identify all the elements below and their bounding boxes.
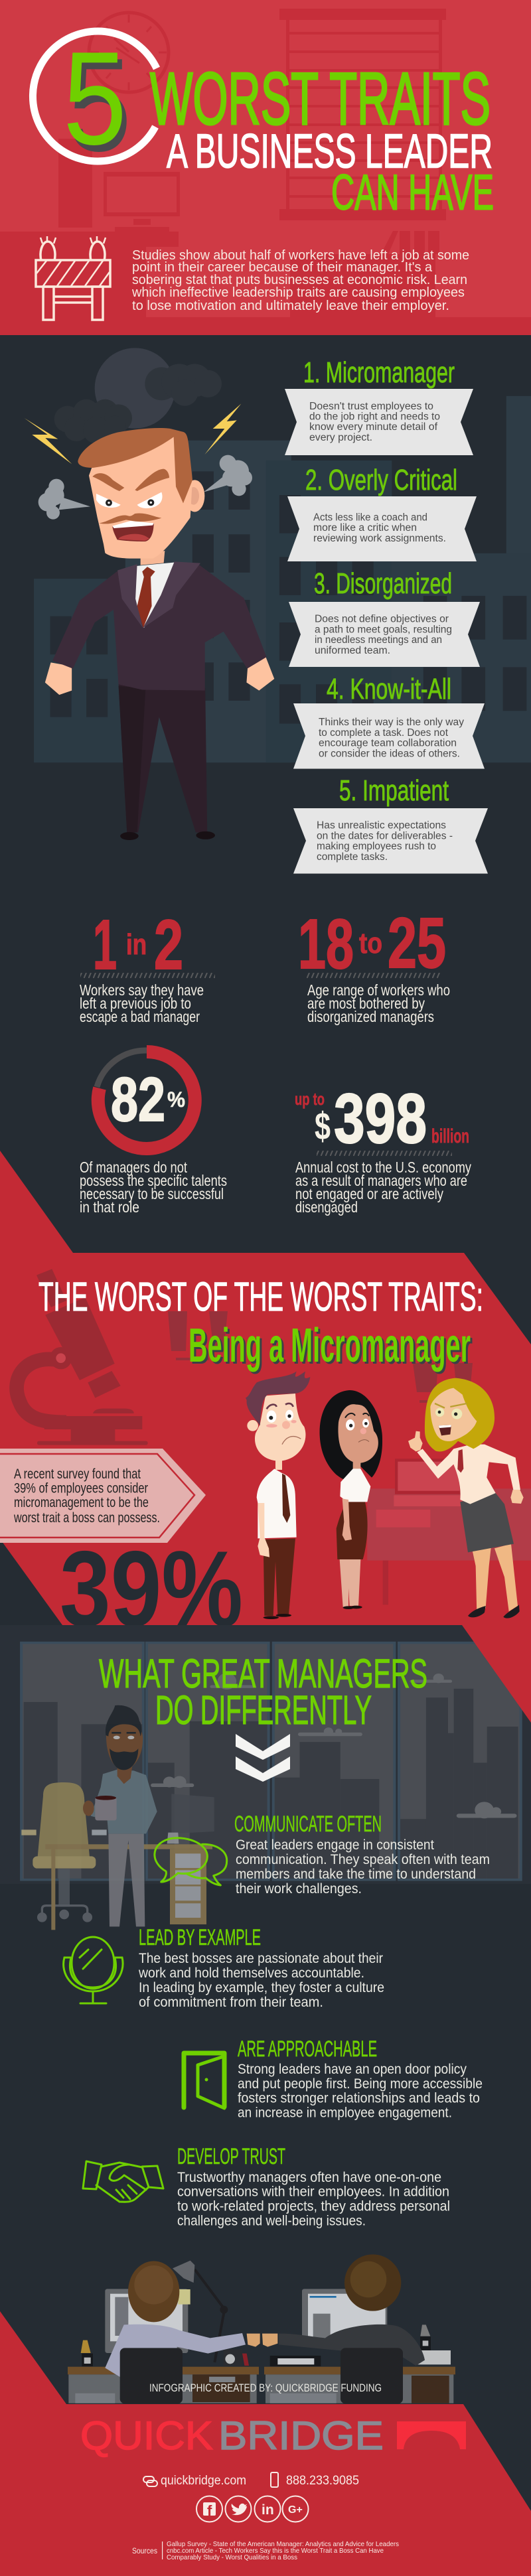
desk [45, 1833, 212, 1930]
boss fists [45, 662, 72, 695]
stat text: disengaged [295, 1198, 358, 1216]
illustration: two colleagues fist bump [68, 2254, 455, 2403]
callout: survey [0, 1449, 206, 1543]
trait 1 heading: 1. Micromanager [303, 356, 455, 389]
illustration: angry boss head [25, 348, 252, 565]
trait 5 ribbon [293, 808, 488, 873]
trait 5 text: Has unrealistic expectations [317, 820, 446, 831]
stat text [80, 1159, 227, 1216]
stat number: 2 [154, 906, 183, 984]
trait 3 text: Does not define objectives or [315, 613, 449, 625]
stat text: Of managers do not [80, 1159, 187, 1176]
desk right [264, 2367, 455, 2403]
sad woman [320, 1390, 382, 1609]
trait 5 text: making employees rush to [317, 841, 436, 852]
trait 3 text: uniformed team. [315, 645, 390, 656]
stat: 82% [80, 1050, 227, 1216]
trait 3 heading: 3. Disorganized [314, 567, 452, 600]
stat number: 18 [298, 905, 354, 983]
stat text: Age range of workers who [307, 981, 450, 999]
background desk and monitor [367, 1459, 531, 1605]
callout text: micromanagement to be the [14, 1495, 149, 1510]
panel: footer [0, 2311, 531, 2576]
contact row: quickbridge.com [161, 2474, 246, 2488]
trait 3 [289, 567, 480, 667]
background microscope [17, 1269, 148, 1445]
neck [141, 551, 165, 565]
stat text: necessary to be successful [80, 1185, 224, 1202]
icon: linkedin: in [262, 2502, 274, 2518]
sources: Gallup Survey - State of the American Manager: Analytics and Advice for Leaders [167, 2540, 399, 2548]
big 39 percent: 39% [60, 1529, 243, 1649]
item heading: ARE APPROACHABLE [238, 2037, 377, 2062]
trait 1 ribbon [285, 389, 473, 455]
background beakers [168, 1311, 473, 1403]
icon: twitter [232, 2504, 247, 2515]
ear [185, 480, 204, 512]
item text: challenges and well-being issues. [177, 2214, 366, 2228]
intro text: to lose motivation and ultimately leave their employer. [132, 299, 449, 313]
mustache [99, 514, 161, 524]
stat number: $ [315, 1105, 331, 1148]
desk items [81, 2325, 451, 2366]
stat number: up to [295, 1089, 325, 1109]
intro text: sobering stat that puts businesses at economic risk. Learn [132, 273, 467, 287]
icon: facebook [203, 2502, 216, 2519]
intro text: which ineffective leadership traits are causing employees [131, 285, 465, 300]
percentage value: % [167, 1088, 185, 1111]
panel: worst trait red background shape [0, 1151, 531, 1723]
item text: Trustworthy managers often have one-on-one [177, 2170, 441, 2185]
trait 1 text: do the job right and needs to [309, 411, 440, 422]
sticky note [178, 2289, 190, 2305]
illustration: coworkers [246, 1372, 524, 1619]
trait 1 text: know every minute detail of [309, 421, 438, 433]
trait 2 text: more like a critic when [313, 522, 417, 534]
sad man [246, 1372, 310, 1619]
trait 2 text [313, 512, 446, 544]
item heading: COMMUNICATE OFTEN [234, 1812, 382, 1837]
intro text: point in their career because of their manager. It's a [132, 260, 433, 275]
face [89, 437, 192, 559]
sources: cnbc.com Article - Tech Workers Say this is the Worst Trait a Boss Can Have [167, 2547, 384, 2555]
stat text: in that role [80, 1198, 139, 1216]
trait 3 text [315, 613, 452, 656]
trait 5 heading: 5. Impatient [339, 774, 449, 807]
stat number [298, 902, 446, 983]
lightning bolts [25, 403, 241, 464]
trait 3 text: a path to meet goals, resulting [315, 624, 452, 636]
stat number: billion [431, 1125, 469, 1147]
background office illustration [0, 9, 531, 335]
stat number: 398 [334, 1080, 427, 1158]
icon: facebook: f [207, 2502, 212, 2519]
background clock [89, 13, 169, 92]
social icons [196, 2496, 308, 2522]
stat text: possess the specific talents [80, 1172, 227, 1189]
callout text [13, 1467, 160, 1526]
item: lead by example [64, 1925, 384, 2010]
icon: road barrier [36, 236, 110, 320]
item text: members and take the time to understand [236, 1867, 476, 1882]
angry woman [408, 1378, 524, 1618]
icon: open door [184, 2053, 224, 2108]
trait 2 text: Acts less like a coach and [313, 512, 427, 523]
item text [238, 2062, 483, 2121]
trait 4 heading: 4. Know-it-All [327, 673, 451, 705]
right monitor [302, 2289, 387, 2338]
illustration: angry boss body [45, 561, 274, 840]
trait 4 [293, 673, 485, 768]
intro text: Studies show about half of workers have left a job at some [132, 248, 469, 263]
eyebrows [92, 469, 169, 491]
item text: The best bosses are passionate about their [139, 1951, 383, 1966]
what great managers heading: DO DIFFERENTLY [155, 1687, 372, 1733]
callout text: A recent survey found that [14, 1467, 141, 1482]
trait 4 text: to complete a task. Does not [319, 727, 449, 739]
trait 2 ribbon [287, 496, 477, 561]
panel: traits background buildings [34, 396, 531, 762]
trait 3 ribbon [289, 602, 480, 667]
sources: Sources [132, 2546, 157, 2555]
item text [177, 2170, 450, 2228]
trait 1 text: Doesn't trust employees to [309, 401, 433, 412]
logo [80, 2413, 466, 2458]
illustration: manager in office [21, 1705, 214, 1930]
donut chart [97, 1050, 195, 1149]
trait 5 text [317, 820, 453, 863]
stat text: Annual cost to the U.S. economy [295, 1159, 471, 1176]
item heading: DEVELOP TRUST [177, 2144, 285, 2169]
intro text [131, 248, 469, 313]
steam clouds [38, 455, 252, 520]
trait 1 [285, 356, 473, 455]
trait 4 text: encourage team collaboration [319, 738, 457, 749]
item text: and put people first. Being more accessible [238, 2076, 483, 2092]
item heading: LEAD BY EXAMPLE [139, 1925, 261, 1950]
stat number: 1 [93, 906, 117, 984]
icon: speech bubbles [155, 1838, 227, 1885]
stat: $398 billion [295, 1080, 471, 1216]
stat number: 25 [388, 902, 446, 983]
stat text: are most bothered by [307, 995, 425, 1012]
item text: Great leaders engage in consistent [236, 1837, 434, 1853]
stat number [93, 906, 183, 984]
stat text [80, 981, 204, 1025]
trait 1 text [309, 401, 440, 443]
item text: their work challenges. [236, 1881, 362, 1896]
manager [83, 1705, 157, 1926]
credit line: INFOGRAPHIC CREATED BY: QUICKBRIDGE FUNDING [149, 2382, 382, 2394]
icon: double chevron [236, 1734, 290, 1782]
icon: link [143, 2476, 157, 2486]
icon: handshake [83, 2161, 163, 2202]
monitor [171, 1794, 214, 1833]
left person [105, 2261, 260, 2403]
stat text [295, 1159, 471, 1216]
callout text: 39% of employees consider [14, 1481, 148, 1496]
trait 3 text: in needless meetings and an [315, 634, 442, 646]
percentage value: 82 [111, 1064, 165, 1134]
sources [132, 2540, 399, 2561]
right person [262, 2254, 425, 2403]
item text: conversations with their employees. In addition [177, 2184, 449, 2199]
desk lamp [173, 2261, 228, 2362]
eyes [96, 492, 162, 508]
stat text: disorganized managers [307, 1008, 434, 1025]
item text: Strong leaders have an open door policy [238, 2062, 467, 2077]
item text [236, 1837, 490, 1896]
stat: 1 in 2 [80, 906, 215, 1025]
callout text: worst trait a boss can possess. [13, 1510, 160, 1526]
item text: work and hold themselves accountable. [138, 1966, 364, 1981]
item text: an increase in employee engagement. [238, 2105, 452, 2121]
what great managers heading [99, 1651, 427, 1733]
trait 2 text: reviewing work assignments. [313, 533, 446, 544]
trait 5 [293, 774, 488, 873]
icon: google plus: G+ [288, 2504, 303, 2516]
stat number [295, 1080, 469, 1158]
boss jacket [52, 565, 267, 691]
title ring around the 5 [33, 31, 157, 161]
item: communicate often [155, 1812, 490, 1896]
panel: managers background office [0, 1625, 531, 1924]
item: develop trust [83, 2144, 450, 2228]
left monitor [105, 2289, 188, 2353]
item text: of commitment from their team. [139, 1995, 323, 2010]
dark moon and clouds [54, 348, 222, 443]
office chair [21, 1782, 107, 1922]
trait 4 text [319, 717, 464, 759]
stat: 18 to 25 [298, 902, 450, 1025]
trait 4 ribbon [293, 703, 485, 768]
trait 2 heading: 2. Overly Critical [305, 464, 457, 496]
stat text: as a result of managers who are [295, 1172, 467, 1189]
stat number: to [359, 927, 382, 960]
item text: fosters stronger relationships and leads to [238, 2090, 480, 2106]
item text: communication. They speak often with team [236, 1852, 490, 1867]
trait 5 text: complete tasks. [317, 851, 388, 863]
panel: worst trait background [17, 1269, 531, 1605]
trait 4 text: or consider the ideas of others. [319, 749, 460, 759]
trait 1 text: every project. [309, 432, 372, 443]
title number 5: 5 [63, 25, 127, 173]
trait 5 text: on the dates for deliverables - [317, 831, 453, 841]
item text [138, 1951, 384, 2010]
panel: header [0, 0, 531, 335]
stat text: escape a bad manager [80, 1008, 200, 1025]
contact row [143, 2472, 359, 2488]
trait 4 text: Thinks their way is the only way [319, 717, 464, 728]
contact row: 888.233.9085 [286, 2474, 359, 2488]
hair [78, 428, 192, 503]
logo: BRIDGE [218, 2413, 384, 2458]
boss trousers [119, 684, 207, 832]
item: are approachable [184, 2037, 483, 2121]
desk left [68, 2367, 259, 2403]
title [150, 58, 494, 220]
mouth [112, 521, 154, 541]
logo bridge mark [397, 2421, 466, 2449]
trait 2 [287, 464, 477, 561]
stat text: not engaged or are actively [295, 1185, 443, 1202]
stat text: left a previous job to [80, 995, 191, 1012]
sources: Comparably Study - Worst Qualities in a Boss [167, 2553, 297, 2561]
icon: phone [271, 2472, 278, 2487]
stat text [307, 981, 450, 1025]
item text: In leading by example, they foster a culture [139, 1980, 384, 1995]
icon: mirror [64, 1937, 123, 2003]
stat number: in [126, 928, 147, 961]
item text: to work-related projects, they address personal [177, 2199, 450, 2214]
logo: QUICK [80, 2413, 213, 2458]
stat text: Workers say they have [80, 981, 204, 999]
